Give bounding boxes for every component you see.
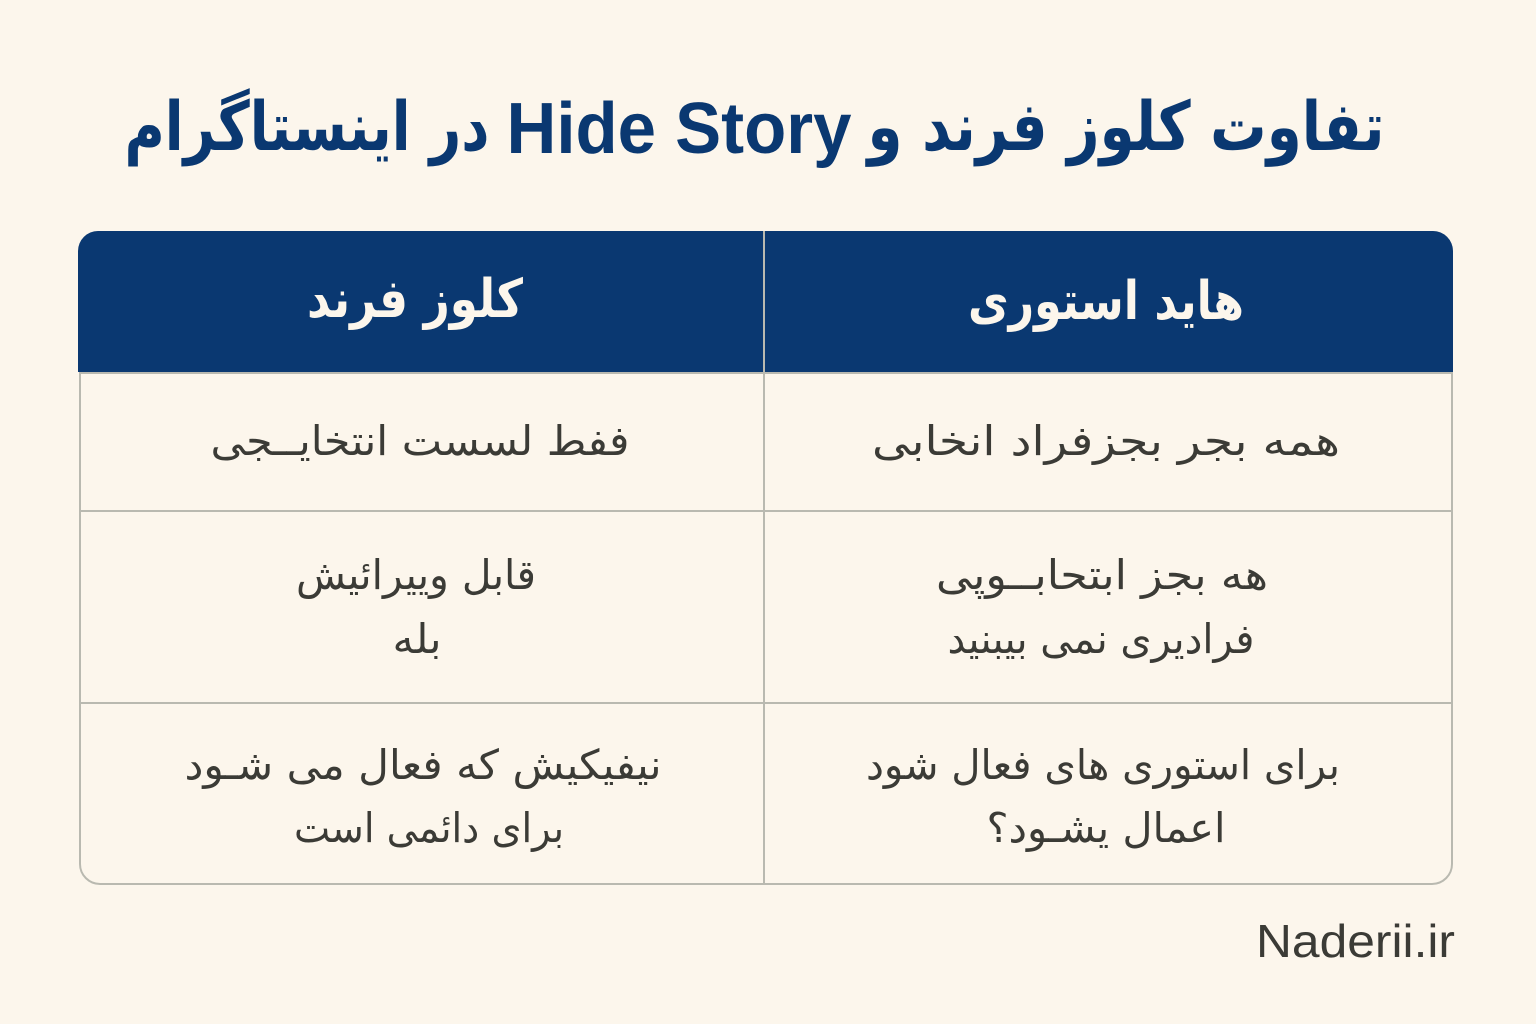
row 3 hide story cell: اعمال یشـود؟ [986,804,1226,852]
row 3 hide story cell: برای استوری های فعال شود [866,741,1340,789]
row 3 close friends cell: برای دائمی است [294,804,564,852]
header: close friends: کلوز فرند [307,269,523,330]
table frame [80,232,1452,884]
row 2 close friends cell: قابل وییرائیش [296,551,536,599]
row 2 close friends cell [296,551,536,663]
title [124,88,1384,169]
row 3 close friends cell [184,741,662,852]
row 2 hide story cell [936,551,1268,663]
row 1 close friends cell: ففط لسست انتخایــجی [210,417,630,465]
row 1 hide story cell: همه بجر بجزفراد انخابی [872,417,1340,465]
row 2 close friends cell: بله [392,615,442,663]
row 2 hide story cell: هه بجز ابتحابــوپی [936,551,1268,600]
title: Hide Story [506,89,852,169]
table header band [78,231,1453,372]
row 3 hide story cell [866,741,1340,852]
title: تفاوت کلوز فرند و [865,88,1384,167]
row 3 close friends cell: نیفیکیش که فعال می شـود [184,741,662,789]
title: در اینستاگرام [124,88,490,167]
brand name: Naderii.ir [1256,915,1455,967]
row 2 hide story cell: فرادیری نمی بیبنید [948,615,1254,663]
header: hide story: هاید استوری [968,271,1244,332]
comparison table [78,231,1453,884]
